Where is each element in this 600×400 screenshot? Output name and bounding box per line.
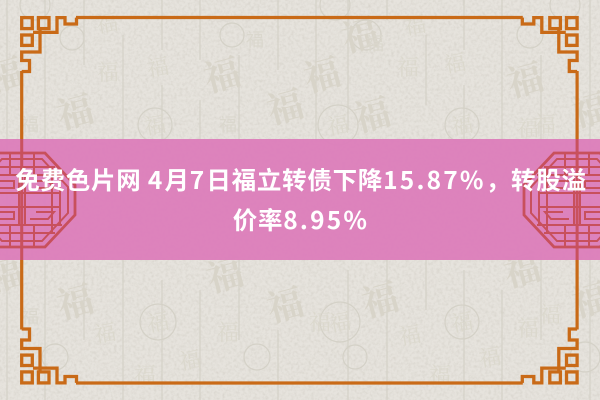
title text: 免费色片网 4月7日福立转债下降15.87%，转股溢: [15, 162, 587, 197]
background paper with watermark: 福: [198, 44, 246, 103]
background paper with watermark: 福: [441, 45, 468, 80]
background paper with watermark: 福: [366, 30, 384, 56]
background paper with watermark: 福: [501, 49, 549, 108]
background paper with watermark: 福: [326, 304, 353, 339]
background paper with watermark: 福: [539, 298, 561, 329]
background paper with watermark: 福: [219, 111, 237, 137]
background paper with watermark: 福: [476, 339, 503, 374]
background paper with watermark: 福: [217, 316, 239, 347]
title text: 价率8.95%: [233, 202, 369, 237]
background paper with watermark: 福: [201, 244, 249, 303]
background paper with watermark: 福: [517, 112, 539, 143]
background paper with watermark: 福: [401, 7, 428, 42]
background paper with watermark: 福: [429, 359, 451, 390]
background paper with watermark: 福: [51, 271, 99, 330]
background paper with watermark: 福: [51, 81, 99, 140]
background paper with watermark: 福: [91, 315, 118, 350]
background paper with watermark: 福: [261, 274, 309, 333]
background paper with watermark: 福: [21, 303, 39, 329]
background paper with watermark: 福: [534, 108, 556, 139]
background paper with watermark: 福: [261, 76, 309, 135]
title text: [15, 162, 587, 237]
background paper with watermark: 福: [324, 107, 351, 142]
background paper with watermark: 福: [397, 51, 419, 82]
background paper with watermark: 福: [144, 49, 171, 84]
background paper with watermark: 福: [336, 4, 384, 63]
background paper with watermark: 福: [448, 304, 475, 339]
background paper with watermark: 福: [97, 56, 119, 87]
background paper with watermark: 福: [309, 306, 331, 337]
background paper with watermark: 福: [141, 107, 168, 142]
background paper with watermark: 福: [176, 342, 203, 377]
background paper with watermark: 福: [93, 5, 120, 40]
background paper with watermark: 福: [498, 239, 546, 298]
background paper with watermark: 福: [348, 84, 396, 143]
background paper with watermark: 福: [298, 44, 346, 103]
background paper with watermark: 福: [356, 269, 404, 328]
background paper with watermark: 福: [134, 359, 156, 390]
background paper with watermark: 福: [517, 312, 539, 343]
background paper with watermark: 福: [144, 304, 171, 339]
background paper with watermark: 福: [396, 317, 423, 352]
background paper with watermark: 福: [21, 111, 39, 137]
background paper with watermark: 福: [448, 107, 475, 142]
background paper with watermark: 福: [246, 26, 264, 52]
